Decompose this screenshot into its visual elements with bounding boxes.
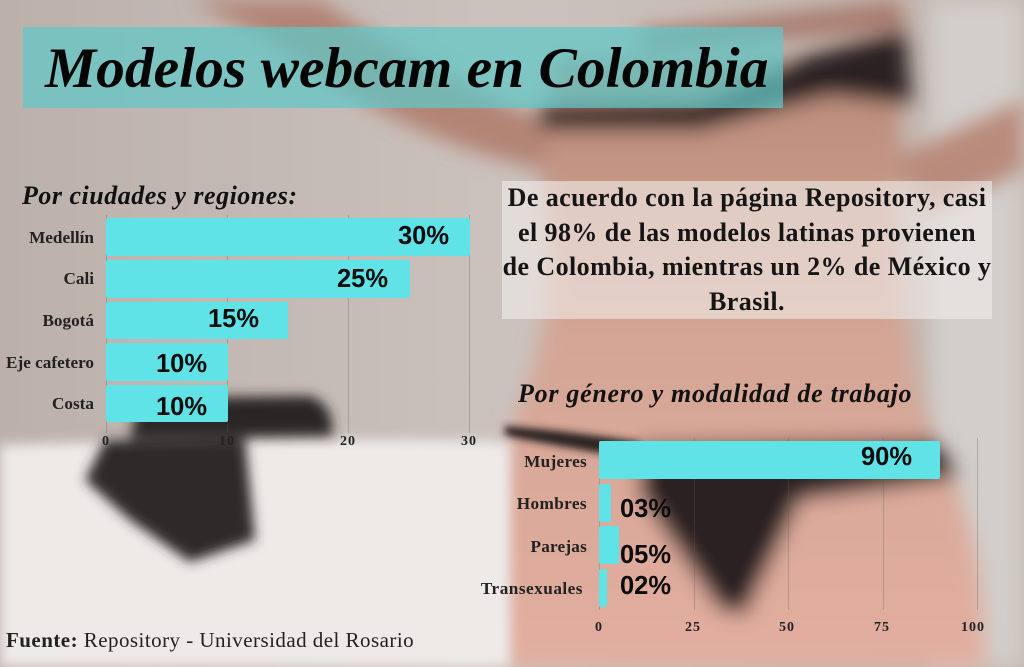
bar chart: gender and work mode: Transexuales — [481, 579, 583, 598]
bar chart: cities: Medellín — [29, 228, 94, 247]
bar chart: cities: 10% — [156, 393, 207, 421]
bar chart: gender and work mode: Hombres — [517, 494, 587, 513]
bar chart: gender and work mode: 02% — [620, 572, 671, 600]
bar chart: cities — [6, 215, 477, 449]
bar chart: gender and work mode: 05% — [620, 541, 671, 569]
bar chart: gender and work mode: 100 — [961, 620, 985, 635]
bar chart: gender and work mode — [481, 438, 985, 635]
bar chart: gender and work mode: 03% — [620, 495, 671, 523]
bar chart: cities: 0 — [102, 434, 110, 449]
bar chart: cities: Bogotá — [42, 311, 94, 330]
bar chart: gender and work mode: 0 — [595, 620, 603, 635]
source note: Fuente: Repository - Universidad del Rosario — [6, 628, 414, 652]
text block: Repository callout: el 98% de las modelos latinas provienen — [518, 218, 976, 246]
bar chart: cities: Cali — [63, 269, 94, 288]
bar chart: gender and work mode: Mujeres — [524, 452, 587, 471]
waistband edge — [505, 426, 640, 460]
bar chart: cities: Eje cafetero — [6, 353, 94, 372]
text block: Repository callout — [502, 181, 992, 319]
text block: Repository callout: De acuerdo con la página Repository, casi — [508, 183, 986, 212]
bar chart: gender and work mode: 75 — [874, 620, 890, 635]
bar chart: cities: 15% — [208, 305, 259, 333]
title: Modelos webcam en Colombia — [45, 37, 769, 100]
bar chart: gender and work mode: 90% — [861, 443, 912, 471]
bar chart: gender and work mode: Parejas — [531, 537, 587, 556]
bar chart: cities: 30 — [461, 434, 477, 449]
bar chart: cities: 30% — [398, 222, 449, 250]
bar chart: gender and work mode: 50 — [779, 620, 795, 635]
bar chart: cities: 10 — [219, 434, 235, 449]
text block: Repository callout: Brasil. — [709, 286, 785, 316]
bar chart: cities: 20 — [340, 434, 356, 449]
heading: gender: Por género y modalidad de trabajo — [518, 379, 912, 408]
heading: cities: Por ciudades y regiones: — [22, 181, 298, 210]
text block: Repository callout: de Colombia, mientras un 2% de México y — [503, 252, 991, 281]
bar chart: cities: Costa — [52, 394, 94, 413]
bar chart: cities: 25% — [337, 265, 388, 293]
bar chart: gender and work mode: 25 — [685, 620, 701, 635]
bar chart: cities: 10% — [156, 350, 207, 378]
